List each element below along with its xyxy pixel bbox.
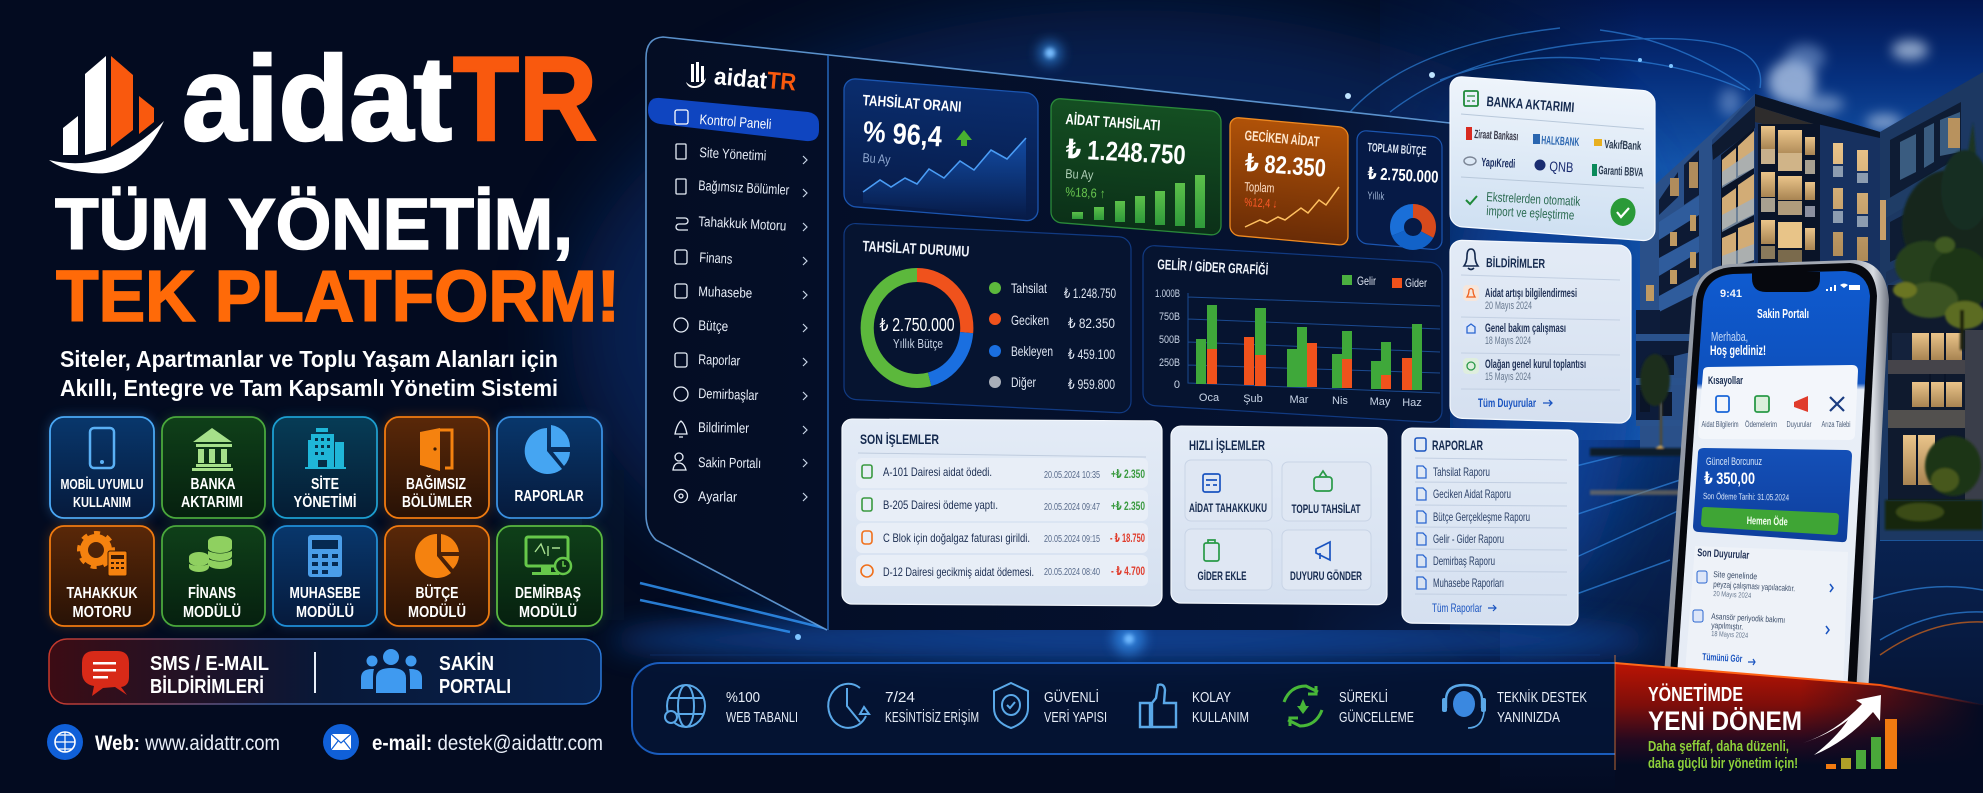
tile: demirbaş modülü: MODÜLÜ (519, 602, 577, 621)
dashboard frame (646, 37, 1655, 630)
month labels: Mar (1290, 394, 1309, 406)
panel: gelir gider grafiği: GELİR / GİDER GRAFİĞİ (1157, 255, 1269, 278)
announcements: 18 Mayıs 2024 (1711, 629, 1748, 640)
text: email: e-mail: destek@aidattr.com (372, 732, 603, 755)
contact row (47, 724, 603, 760)
notification list: Olağan genel kurul toplantısı (1485, 357, 1586, 371)
debt card: Güncel Borcunuz (1706, 456, 1762, 468)
menu: items (698, 144, 790, 505)
debt card: Son Ödeme Tarihi: 31.05.2024 (1703, 491, 1789, 503)
rows: 20.05.2024 10:35 (1044, 470, 1100, 481)
donut center text: Yıllık Bütçe (893, 336, 943, 351)
feature texts: KESİNTİSİZ ERİŞİM (885, 708, 979, 726)
card: aidat tahsilatı: %18,6 ↑ (1065, 184, 1106, 201)
panel: tahsilat durumu: TAHSİLAT DURUMU (862, 238, 970, 261)
shortcuts card: Duyurular (1786, 420, 1812, 429)
icon: bell (1464, 249, 1478, 270)
axes (1155, 288, 1440, 393)
menu: icons (673, 144, 688, 502)
feature texts: VERİ YAPISI (1044, 708, 1107, 726)
card: geciken aidat (1230, 117, 1348, 246)
panel: tahsilat durumu (844, 223, 1131, 413)
rows: +₺ 2.350 (1111, 499, 1145, 513)
legend: ₺ 82.350 (1068, 315, 1115, 331)
announcements: yapılmıştır. (1711, 620, 1743, 632)
report list: Tahsilat Raporu (1433, 465, 1490, 479)
banner text: Daha şeffaf, daha düzenli, (1648, 738, 1789, 755)
bottom features strip (632, 663, 1642, 754)
icon: clock (828, 684, 869, 728)
icon: up arrow (956, 130, 972, 146)
menu: items: Bağımsız Bölümler (698, 177, 790, 198)
legend: Geciken (1011, 312, 1049, 328)
phone mockup: Merhaba, (1711, 329, 1748, 344)
rows: A-101 Dairesi aidat ödedi. (883, 465, 992, 479)
tile: site yönetimi (273, 417, 377, 518)
text: sms e-mail: SMS / E-MAIL (150, 653, 269, 675)
axes: 0 (1174, 379, 1180, 391)
panel: raporlar: RAPORLAR (1432, 437, 1483, 453)
feature texts: SÜREKLİ (1339, 688, 1388, 706)
tile: bağımsız bölümler: BAĞIMSIZ (406, 474, 466, 493)
tile: tahakkuk motoru (50, 526, 154, 626)
notification and portal bar (49, 639, 601, 704)
chart legend: Gelir (1357, 274, 1376, 288)
tower front face (1755, 94, 1886, 300)
notification list: 20 Mayıs 2024 (1485, 300, 1532, 312)
panel: hızlı işlemler: HIZLI İŞLEMLER (1189, 437, 1265, 453)
banner text: daha güçlü bir yönetim için! (1648, 755, 1798, 772)
logo icon (49, 56, 164, 173)
tile: muhasebe modülü: MODÜLÜ (296, 602, 354, 621)
report list: Demirbaş Raporu (1433, 554, 1495, 568)
tile: bütçe modülü: BÜTÇE (416, 583, 459, 602)
panel: hızlı işlemler: TOPLU TAHSİLAT (1292, 501, 1361, 516)
notification list: Tüm Duyurular (1478, 396, 1536, 410)
tile: tahakkuk motoru: MOTORU (72, 604, 132, 621)
report list (1417, 465, 1530, 615)
banner text: YENİ DÖNEM (1648, 706, 1802, 736)
card: geciken aidat: Toplam (1244, 179, 1275, 196)
icon: bank statement (1464, 91, 1478, 106)
tile: finans modülü (162, 526, 265, 626)
donut chart (867, 275, 967, 381)
bank logos: HALKBANK (1541, 133, 1580, 149)
subtitle: Siteler, Apartmanlar ve Toplu Yaşam Alanları için (60, 346, 558, 372)
text: sms e-mail: BİLDİRİMLERİ (150, 675, 264, 698)
panel: hızlı işlemler: GİDER EKLE (1198, 568, 1246, 583)
card: toplam bütçe: Yıllık (1367, 190, 1385, 203)
tile: mobil uyumlu: KULLANIM (73, 494, 131, 511)
menu: items: Sakin Portalı (698, 454, 761, 471)
month labels: May (1370, 396, 1391, 408)
text: sakin portalı: PORTALI (439, 676, 511, 698)
bank logos: VakıfBank (1604, 137, 1642, 153)
lit windows center (1758, 124, 1820, 266)
icon: chat bubble (82, 651, 129, 696)
legend: ₺ 1.248.750 (1064, 285, 1116, 301)
report list: Muhasebe Raporları (1433, 576, 1504, 590)
text: sakin portalı (439, 652, 511, 698)
axes: 750B (1159, 311, 1180, 323)
left wing (1636, 94, 1755, 450)
tile: mobil uyumlu: MOBİL UYUMLU (60, 476, 144, 493)
notification list: Aidat artışı bilgilendirmesi (1485, 286, 1577, 300)
tile: site yönetimi: SİTE (311, 475, 339, 493)
text: sms e-mail (150, 653, 269, 698)
icon: people (361, 649, 422, 693)
report list: Geciken Aidat Raporu (1433, 487, 1511, 501)
line chart (1245, 187, 1339, 227)
card: aidat tahsilatı: ₺ 1.248.750 (1065, 134, 1186, 170)
check and note: import ve eşleştirme (1486, 203, 1575, 223)
logo (49, 32, 597, 173)
rows: - ₺ 18.750 (1110, 531, 1145, 545)
icon: refresh (1284, 686, 1322, 726)
bank logos: Ziraat Bankası (1474, 127, 1519, 143)
subtitle (60, 346, 558, 401)
sidebar logo: aidat (713, 63, 768, 95)
month labels: Şub (1243, 393, 1263, 405)
bank logos: QNB (1549, 158, 1574, 175)
card: aidat tahsilatı: AİDAT TAHSİLATI (1065, 111, 1161, 135)
sidebar logo (686, 62, 797, 97)
report list: Gelir - Gider Raporu (1433, 532, 1504, 546)
panel: raporlar (1402, 428, 1578, 625)
quick action buttons (1185, 460, 1371, 590)
month labels: Haz (1402, 397, 1422, 409)
card: geciken aidat: ₺ 82.350 (1244, 149, 1327, 183)
panel: hızlı işlemler: AİDAT TAHAKKUKU (1189, 500, 1267, 515)
rows: D-12 Dairesi gecikmiş aidat ödemesi. (883, 565, 1034, 579)
card: toplam bütçe (1357, 130, 1442, 250)
wordmark TR: TR (453, 32, 597, 166)
axes: 250B (1159, 357, 1180, 369)
card: geciken aidat: GECİKEN AİDAT (1244, 127, 1320, 150)
panel: bildirimler (1450, 240, 1631, 423)
tile: raporlar (497, 417, 602, 518)
feature texts: GÜNCELLEME (1339, 708, 1414, 726)
headline: TÜM YÖNETİM, (55, 185, 573, 265)
notification list (1463, 285, 1586, 410)
bars (1196, 305, 1422, 390)
mini donut (1397, 211, 1429, 243)
tile: muhasebe modülü: MUHASEBE (290, 585, 361, 602)
panel: bildirimler: BİLDİRİMLER (1486, 255, 1546, 271)
check and note (1466, 189, 1636, 226)
feature texts: %100 (726, 689, 760, 706)
panel: son işlemler (842, 419, 1162, 606)
rows: 20.05.2024 09:47 (1044, 502, 1100, 513)
legend: Tahsilat (1011, 280, 1047, 296)
card: toplam bütçe: ₺ 2.750.000 (1367, 164, 1439, 187)
bar chart (1072, 175, 1205, 228)
feature tiles (50, 417, 602, 626)
rows: C Blok için doğalgaz faturası girildi. (883, 531, 1030, 545)
tile: tahakkuk motoru: TAHAKKUK (66, 585, 138, 602)
menu: active kontrol paneli (648, 98, 819, 141)
month labels: Oca (1199, 392, 1220, 404)
card: geciken aidat: %12,4 ↓ (1244, 195, 1278, 211)
icon: thumb up (1140, 685, 1176, 727)
tile: raporlar: RAPORLAR (514, 488, 584, 505)
menu: items: Bütçe (698, 317, 729, 334)
menu: items: Finans (699, 249, 733, 267)
tile: site yönetimi: YÖNETİMİ (294, 492, 356, 511)
feature texts: YANINIZDA (1497, 709, 1560, 726)
announcements (1685, 546, 1848, 690)
debt card: Hemen Öde (1746, 514, 1788, 528)
bank logos: Garanti BBVA (1598, 163, 1644, 179)
menu: items: Demirbaşlar (698, 385, 759, 403)
sidebar logo: TR (766, 67, 797, 97)
legend: Bekleyen (1011, 343, 1053, 359)
announcements: Son Duyurular (1697, 547, 1750, 562)
feature texts: GÜVENLİ (1044, 688, 1099, 706)
tile: banka aktarımı (162, 417, 265, 518)
card: aidat tahsilatı (1051, 98, 1221, 236)
tile: bütçe modülü (385, 526, 489, 626)
panel: banka aktarımı (1450, 76, 1655, 241)
menu: items: Ayarlar (698, 488, 738, 505)
panel: son işlemler: SON İŞLEMLER (860, 431, 939, 447)
donut center text: ₺ 2.750.000 (880, 315, 954, 335)
legend: Diğer (1011, 374, 1036, 390)
menu: items: Bildirimler (698, 419, 750, 436)
banner text (1648, 683, 1802, 772)
chart legend (1342, 274, 1427, 290)
panel: hızlı işlemler (1171, 426, 1387, 605)
report list: Bütçe Gerçekleşme Raporu (1433, 510, 1530, 524)
bank logos: YapıKredi (1481, 155, 1516, 171)
rows: +₺ 2.350 (1111, 467, 1145, 481)
menu: items: Tahakkuk Motoru (698, 213, 787, 234)
right wing (1880, 72, 1983, 540)
legend: ₺ 459.100 (1068, 346, 1115, 362)
tile: banka aktarımı: AKTARIMI (181, 494, 243, 511)
subtitle: Akıllı, Entegre ve Tam Kapsamlı Yönetim Sistemi (60, 375, 558, 401)
report list: Tüm Raporlar (1432, 601, 1482, 615)
feature texts: 7/24 (885, 689, 915, 706)
card: aidat tahsilatı: Bu Ay (1065, 166, 1094, 182)
feature texts: TEKNİK DESTEK (1497, 688, 1587, 706)
wordmark aidat: aidat (182, 32, 452, 166)
phone screen (1677, 271, 1870, 695)
debt card: ₺ 350,00 (1704, 469, 1755, 488)
tile: bağımsız bölümler (385, 417, 489, 518)
sidebar (648, 62, 819, 505)
chart legend: Gider (1405, 276, 1427, 290)
card: tahsilat oranı: TAHSİLAT ORANI (862, 92, 962, 116)
icon: web (665, 685, 705, 727)
tile: banka aktarımı: BANKA (190, 476, 236, 493)
red banner (1615, 655, 1983, 793)
feature texts (726, 688, 1587, 726)
notification list: 18 Mayıs 2024 (1485, 335, 1531, 347)
panel: banka aktarımı: BANKA AKTARIMI (1486, 93, 1575, 115)
announcements: Asansör periyodik bakımı (1711, 611, 1785, 625)
building photo (1590, 72, 1983, 540)
feature texts: WEB TABANLI (726, 709, 798, 726)
announcements: peyzaj çalışması yapılacaktır. (1713, 579, 1795, 593)
shortcuts card: Kısayollar (1708, 375, 1743, 387)
month labels (1199, 392, 1422, 409)
icon: shield (994, 683, 1028, 728)
legend (989, 280, 1116, 392)
tile: finans modülü: MODÜLÜ (183, 602, 241, 621)
rows: B-205 Dairesi ödeme yaptı. (883, 498, 998, 512)
axes: 500B (1159, 334, 1180, 346)
debt card (1693, 448, 1852, 542)
feature texts: KULLANIM (1192, 709, 1249, 726)
shortcuts card: Aidat Bilgilerim (1702, 420, 1739, 429)
shortcuts card: Arıza Talebi (1822, 420, 1851, 429)
text: sakin portalı: SAKİN (439, 652, 494, 675)
rows: - ₺ 4.700 (1111, 564, 1145, 578)
announcements: Site genelinde (1713, 569, 1758, 581)
donut center text (880, 315, 954, 351)
area chart (863, 138, 1026, 217)
headline: TEK PLATFORM! (56, 257, 620, 337)
headline (55, 185, 620, 337)
tile: finans modülü: FİNANS (188, 584, 236, 602)
month labels: Nis (1332, 395, 1348, 407)
announcements: 20 Mayıs 2024 (1713, 589, 1751, 600)
tower left face (1712, 94, 1755, 300)
shortcuts card: Ödemelerim (1745, 420, 1777, 429)
tile: mobil uyumlu (50, 417, 154, 518)
menu: items: Raporlar (698, 351, 741, 368)
announcements: Tümünü Gör (1702, 652, 1743, 665)
menu: chevrons (803, 156, 807, 501)
tile: demirbaş modülü: DEMİRBAŞ (515, 584, 581, 602)
banner text: YÖNETİMDE (1648, 683, 1743, 706)
icon: headset (1442, 685, 1486, 728)
tile: bağımsız bölümler: BÖLÜMLER (402, 492, 472, 511)
icon: mail (323, 724, 359, 760)
phone mockup: Sakin Portalı (1757, 306, 1809, 321)
clouds (1719, 40, 1928, 130)
menu: active kontrol paneli: Kontrol Paneli (699, 111, 772, 132)
icon: globe (47, 724, 83, 760)
menu: items: Site Yönetimi (699, 144, 767, 164)
card: toplam bütçe: TOPLAM BÜTÇE (1367, 139, 1427, 158)
tile: bütçe modülü: MODÜLÜ (408, 602, 466, 621)
feature texts: KOLAY (1192, 689, 1231, 706)
status bar (1720, 284, 1860, 300)
status bar: 9:41 (1720, 288, 1742, 300)
menu: items: Muhasebe (698, 283, 753, 301)
growth chart (1803, 695, 1897, 769)
tile: demirbaş modülü (497, 526, 602, 626)
tile: muhasebe modülü (273, 526, 377, 626)
card: tahsilat oranı: % 96,4 (862, 116, 943, 154)
rows: 20.05.2024 08:40 (1044, 567, 1100, 578)
rows (856, 458, 1148, 586)
check and note: Ekstrelerden otomatik (1486, 189, 1581, 209)
notification list: Genel bakım çalışması (1485, 321, 1566, 335)
panel: hızlı işlemler: DUYURU GÖNDER (1290, 568, 1362, 583)
text: web: Web: www.aidattr.com (95, 732, 280, 755)
card: tahsilat oranı: Bu Ay (862, 150, 891, 167)
rows: 20.05.2024 09:15 (1044, 534, 1100, 545)
phone mockup: Hoş geldiniz! (1710, 342, 1766, 358)
bank logos (1464, 127, 1644, 179)
trees (1590, 122, 1983, 530)
legend: ₺ 959.800 (1068, 376, 1115, 392)
panel: gelir gider grafiği (1143, 245, 1442, 423)
notification list: 15 Mayıs 2024 (1485, 371, 1531, 383)
card: tahsilat oranı (844, 78, 1038, 222)
phone mockup (1664, 260, 1889, 695)
axes: 1.000B (1155, 288, 1180, 300)
notch (1752, 272, 1820, 292)
shortcuts card (1698, 365, 1858, 440)
